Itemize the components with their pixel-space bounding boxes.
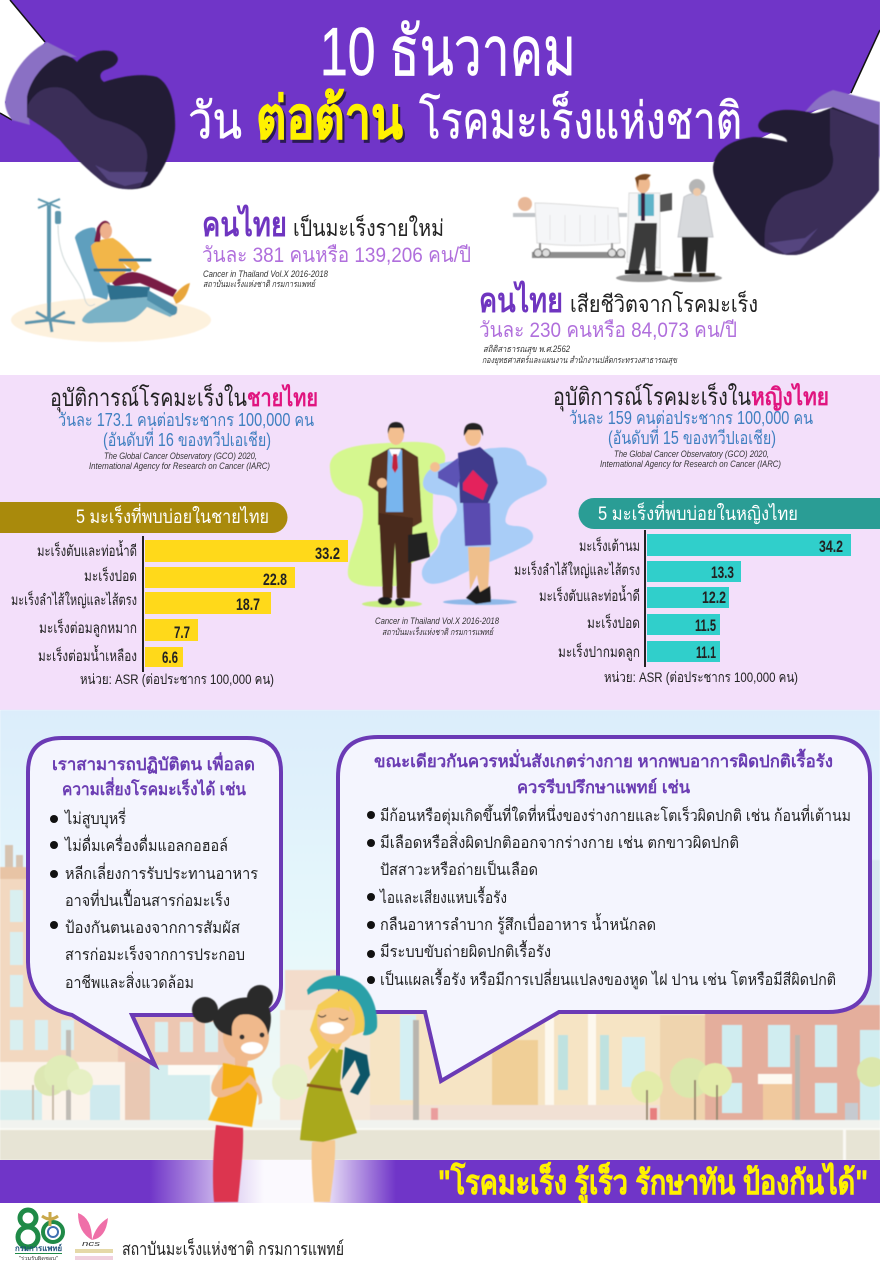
- callout: warning symptoms: [338, 737, 870, 1081]
- source: deaths: สถิติสาธารณสุข พ.ศ.2562: [483, 344, 570, 355]
- icon: patient on infusion chair: [11, 199, 211, 342]
- callout heading: warning symptoms: ควรรีบปรึกษาแพทย์ เช่น: [517, 777, 690, 797]
- heading: women incidence: อุบัติการณ์โรคมะเร็งใน: [553, 382, 751, 412]
- list: risk reduction: [50, 807, 258, 992]
- text: women incidence rate: วันละ 159 คนต่อประชากร 100,000 คน: [569, 408, 813, 428]
- source: men incidence: The Global Cancer Observatory (GCO) 2020,: [104, 451, 257, 461]
- heading: men incidence: อุบัติการณ์โรคมะเร็งใน: [50, 383, 247, 413]
- source: women incidence: International Agency for Research on Cancer (IARC): [600, 459, 781, 469]
- source: men incidence: International Agency for Research on Cancer (IARC): [89, 461, 270, 471]
- text: men incidence rate: (อันดับที่ 16 ของทวีปเอเชีย): [103, 427, 271, 450]
- footer organisation name: สถาบันมะเร็งแห่งชาติ กรมการแพทย์: [122, 1237, 344, 1259]
- list: warning symptoms: [367, 804, 851, 990]
- list: risk reduction: อาชีพและสิ่งแวดล้อม: [65, 971, 194, 992]
- list: warning symptoms: มีเลือดหรือสิ่งผิดปกติออกจากร่างกาย เช่น ตกขาวผิดปกติ: [380, 831, 739, 852]
- text: new cases figure: วันละ 381 คนหรือ 139,206 คน/ปี: [202, 244, 471, 267]
- logo: department of medical services: "ร่วมรับผิดชอบ": [19, 1255, 58, 1262]
- panel: left glove: [5, 42, 175, 189]
- list: risk reduction: ป้องกันตนเองจากการสัมผัส: [65, 919, 240, 937]
- bar: colorectal women: [514, 560, 741, 582]
- list: warning symptoms: เป็นแผลเรื้อรัง หรือมีการเปลี่ยนแปลงของหูด ไฝ ปาน เช่น โตหรือมีสีผิดปกติ: [380, 968, 836, 990]
- bar: lymphoma men: 6.6: [162, 648, 178, 667]
- logo: national cancer institute: [75, 1213, 113, 1260]
- heading: deaths: [479, 280, 758, 320]
- source: deaths: [482, 344, 678, 366]
- source: center illustration: Cancer in Thailand Vol.X 2016-2018: [375, 616, 499, 626]
- bar: prostate men: 7.7: [174, 623, 190, 642]
- heading: new cases: เป็นมะเร็งรายใหม่: [293, 213, 444, 241]
- slogan band: [0, 1160, 880, 1204]
- logo: national cancer institute: ncs: [82, 1241, 101, 1248]
- list: warning symptoms: ปัสสาวะหรือถ่ายเป็นเลือด: [380, 859, 538, 879]
- callout heading: risk reduction: เราสามารถปฏิบัติตน เพื่อลด: [52, 752, 255, 774]
- panel: deaths: [479, 174, 758, 366]
- source: new cases: [203, 269, 328, 289]
- text: women incidence rate: [569, 408, 813, 448]
- bar: lung women: [587, 613, 720, 635]
- panel: right glove: [713, 90, 880, 255]
- source: center illustration: [375, 616, 499, 637]
- source: new cases: Cancer in Thailand Vol.X 2016-2018: [203, 269, 328, 279]
- bar: lung women: มะเร็งปอด: [587, 613, 640, 632]
- list: risk reduction: หลีกเลี่ยงการรับประทานอาหาร: [65, 862, 258, 883]
- bar: colorectal men: 18.7: [236, 595, 260, 614]
- callout heading: risk reduction: ความเสี่ยงโรคมะเร็งได้ เช่น: [62, 777, 246, 799]
- panel: footer: [0, 1203, 880, 1270]
- bar: lung women: 11.5: [695, 616, 716, 635]
- bar: breast women: มะเร็งเต้านม: [579, 536, 640, 555]
- bar: colorectal men: มะเร็งลำไส้ใหญ่และไส้ตรง: [11, 590, 137, 609]
- bar: lung men: 22.8: [263, 570, 287, 589]
- title: day name: ต่อต้าน: [256, 86, 403, 151]
- chart: men top 5 cancers: [0, 502, 348, 687]
- text: deaths figure: วันละ 230 คนหรือ 84,073 คน/ปี: [479, 319, 737, 342]
- heading: new cases: [202, 204, 444, 244]
- list: risk reduction: สารก่อมะเร็งจากการประกอบ: [65, 944, 245, 964]
- bar: cervix women: [558, 641, 720, 662]
- source: deaths: กองยุทธศาสตร์และแผนงาน สำนักงานปลัดกระทรวงสาธารณสุข: [482, 355, 678, 366]
- heading: deaths: เสียชีวิตจากโรคมะเร็ง: [570, 289, 758, 317]
- callout heading: warning symptoms: ขณะเดียวกันควรหมั่นสังเกตร่างกาย หากพบอาการผิดปกติเรื้อรัง: [374, 748, 833, 771]
- bar: lung men: [84, 566, 295, 589]
- bar: prostate men: [39, 618, 198, 642]
- list: warning symptoms: มีระบบขับถ่ายผิดปกติเรื้อรัง: [380, 940, 551, 961]
- text: men incidence rate: วันละ 173.1 คนต่อประชากร 100,000 คน: [58, 410, 314, 430]
- panel: city background: [0, 710, 880, 1160]
- bar: liver men: [37, 540, 348, 563]
- title: day name: โรคมะเร็งแห่งชาติ: [419, 91, 742, 149]
- logo: department of medical services: [15, 1210, 63, 1262]
- illustration: businessman and businesswoman: [330, 422, 547, 608]
- panel: incidence: [0, 375, 880, 710]
- text: men incidence rate: [58, 410, 314, 450]
- list: risk reduction: ไม่ดื่มเครื่องดื่มแอลกอฮอล์: [63, 834, 228, 855]
- text: women incidence rate: (อันดับที่ 15 ของทวีปเอเชีย): [608, 425, 776, 448]
- bar: breast women: 34.2: [819, 537, 843, 556]
- heading: men incidence: ชายไทย: [247, 383, 318, 412]
- bar: breast women: [579, 534, 851, 556]
- heading: new cases: คนไทย: [202, 204, 287, 244]
- list: warning symptoms: ไอและเสียงแหบเรื้อรัง: [378, 886, 507, 907]
- bar: liver women: 12.2: [702, 588, 726, 607]
- source: women incidence: The Global Cancer Observatory (GCO) 2020,: [614, 449, 769, 459]
- chart header: women: [578, 498, 880, 529]
- heading: deaths: คนไทย: [479, 280, 563, 320]
- callout: risk reduction: [28, 738, 281, 1065]
- bar: cervix women: มะเร็งปากมดลูก: [558, 642, 640, 661]
- source: men incidence: [89, 451, 270, 471]
- title: date: 10 ธันวาคม: [320, 14, 576, 90]
- heading: women incidence: หญิงไทย: [751, 382, 829, 411]
- bar: liver men: 33.2: [315, 544, 340, 563]
- logo: department of medical services: กรมการแพทย์: [15, 1243, 62, 1253]
- callout heading: warning symptoms: [374, 748, 833, 797]
- bar: lymphoma men: [38, 645, 183, 667]
- title: day name: ต่อต้าน: [258, 89, 405, 154]
- chart unit: men: หน่วย: ASR (ต่อประชากร 100,000 คน): [80, 671, 274, 687]
- bar: liver women: [539, 585, 729, 608]
- list: warning symptoms: กลืนอาหารลำบาก รู้สึกเบื่ออาหาร น้ำหนักลด: [380, 913, 656, 935]
- bar: colorectal women: มะเร็งลำไส้ใหญ่และไส้ตรง: [514, 560, 640, 579]
- bar: prostate men: มะเร็งต่อมลูกหมาก: [39, 618, 137, 637]
- panel: header banner: [0, 0, 880, 162]
- bar: liver women: มะเร็งตับและท่อน้ำดี: [539, 585, 640, 605]
- title: day name: [188, 86, 742, 154]
- callout heading: risk reduction: [52, 752, 255, 799]
- title: day name: วัน: [188, 93, 242, 149]
- bar: lymphoma men: มะเร็งต่อมน้ำเหลือง: [38, 645, 137, 665]
- bar: cervix women: 11.1: [696, 643, 716, 662]
- bar: liver men: มะเร็งตับและท่อน้ำดี: [37, 540, 137, 560]
- panel: new cases: [11, 199, 471, 342]
- chart header: men: 5 มะเร็งที่พบบ่อยในชายไทย: [76, 503, 269, 528]
- illustration: two women talking: [192, 975, 377, 1202]
- icon: doctor, relative and hospital bed: [513, 174, 722, 282]
- bar: colorectal men: [11, 590, 271, 614]
- source: center illustration: สถาบันมะเร็งแห่งชาติ กรมการแพทย์: [382, 626, 495, 637]
- chart: women top 5 cancers: [514, 498, 880, 685]
- list: risk reduction: ไม่สูบบุหรี่: [63, 807, 126, 829]
- chart header: women: 5 มะเร็งที่พบบ่อยในหญิงไทย: [598, 500, 798, 525]
- list: risk reduction: อาจที่ปนเปื้อนสารก่อมะเร็ง: [65, 889, 230, 910]
- chart unit: women: หน่วย: ASR (ต่อประชากร 100,000 คน): [604, 669, 798, 685]
- chart header: men: [0, 502, 287, 533]
- source: new cases: สถาบันมะเร็งแห่งชาติ กรมการแพทย์: [203, 278, 317, 289]
- bar: lung men: มะเร็งปอด: [84, 566, 137, 585]
- bar: colorectal women: 13.3: [711, 563, 734, 582]
- source: women incidence: [600, 449, 781, 469]
